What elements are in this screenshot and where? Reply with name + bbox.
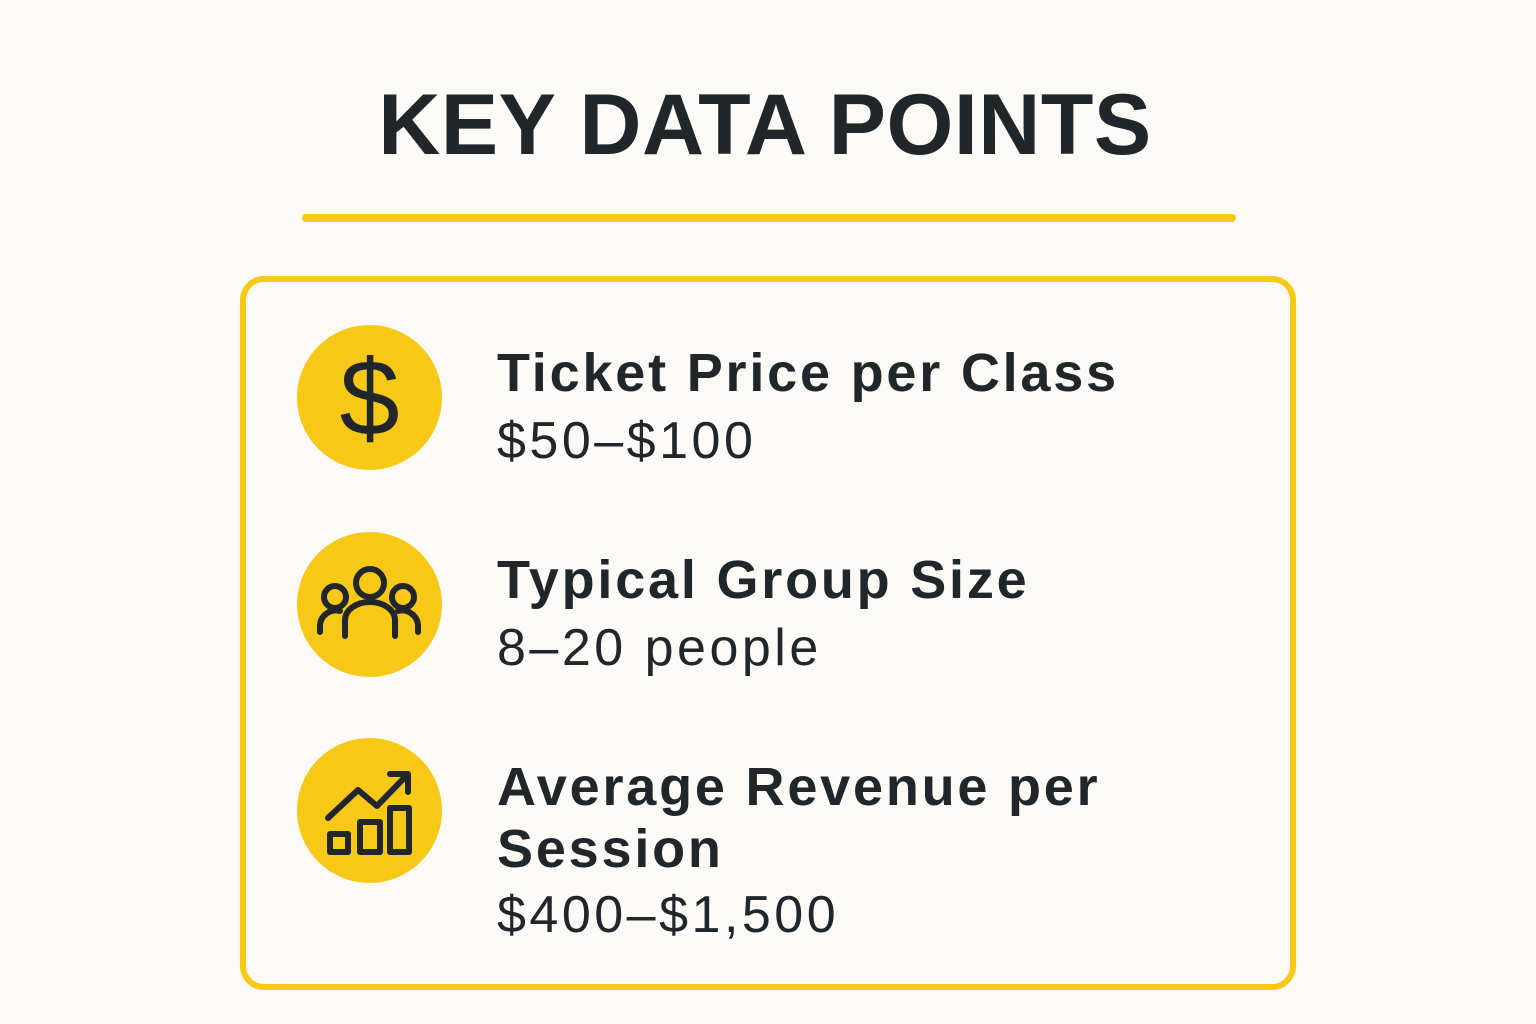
- icon: people: [297, 532, 442, 677]
- title underline: [302, 214, 1236, 222]
- row 3 title: Session: [497, 819, 724, 879]
- row 2 title: Typical Group Size: [497, 550, 1030, 610]
- row 2 value: 8–20 people: [497, 619, 822, 677]
- icon: chart: [297, 738, 442, 883]
- row 3 title: [497, 757, 1100, 879]
- row 3 value: $400–$1,500: [497, 886, 839, 944]
- icon: dollar: $: [339, 337, 400, 458]
- panel: key data box: [240, 276, 1296, 990]
- title: KEY DATA POINTS: [378, 77, 1152, 173]
- icon: dollar: [297, 325, 442, 470]
- row 3 title: Average Revenue per: [497, 757, 1100, 817]
- row 1 title: Ticket Price per Class: [497, 343, 1119, 403]
- row 1 value: $50–$100: [497, 412, 756, 470]
